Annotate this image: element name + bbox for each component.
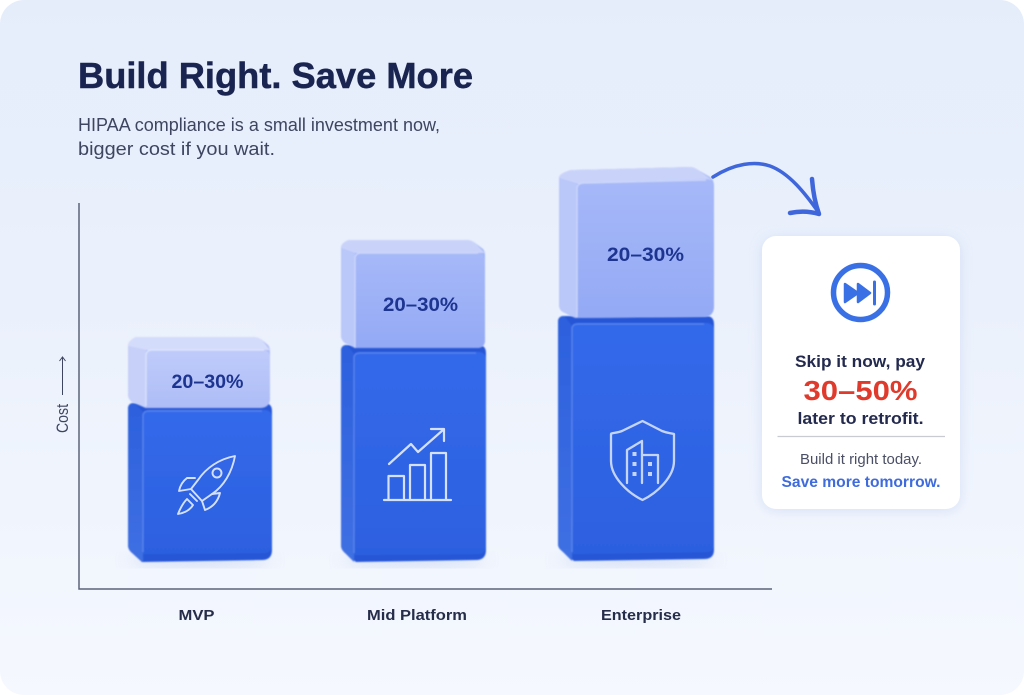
icon: shield with buildings	[611, 421, 674, 500]
arrow	[713, 164, 819, 214]
Enterprise top block	[559, 167, 714, 318]
icon: rocket	[178, 456, 235, 514]
chart axes	[79, 203, 772, 589]
MVP top block	[128, 337, 270, 408]
icon: skip forward	[834, 266, 888, 320]
subtitle	[78, 115, 440, 159]
bar labels	[178, 607, 681, 624]
Mid Platform percent label: 20–30%	[383, 295, 458, 316]
subtitle: bigger cost if you wait.	[78, 139, 275, 159]
subtitle: HIPAA compliance is a small investment now,	[78, 115, 440, 135]
axis label: cost	[53, 357, 72, 433]
callout text: skip it now: Skip it now, pay	[795, 352, 926, 371]
bar labels: Enterprise	[601, 607, 681, 624]
icon: growth chart	[384, 429, 451, 500]
callout text: save more: Save more tomorrow.	[782, 474, 940, 491]
callout text: build it right: Build it right today.	[800, 451, 922, 468]
bar: MVP	[128, 337, 272, 566]
bar labels: Mid Platform	[367, 607, 467, 624]
Mid Platform base block	[341, 345, 486, 562]
bar: Enterprise	[558, 167, 714, 566]
Mid Platform top block	[341, 240, 485, 348]
bar labels: MVP	[178, 607, 214, 624]
Enterprise percent label: 20–30%	[607, 245, 684, 266]
bar: Mid Platform	[341, 240, 486, 566]
MVP base block	[128, 403, 272, 562]
panel: callout card	[762, 236, 960, 509]
title: Build Right. Save More	[78, 55, 473, 96]
axis label: cost: Cost	[53, 404, 72, 433]
MVP percent label: 20–30%	[172, 372, 244, 393]
Enterprise base block	[558, 316, 714, 561]
callout text: later to retrofit: later to retrofit.	[798, 409, 924, 428]
callout figure: 30–50%	[804, 375, 918, 406]
